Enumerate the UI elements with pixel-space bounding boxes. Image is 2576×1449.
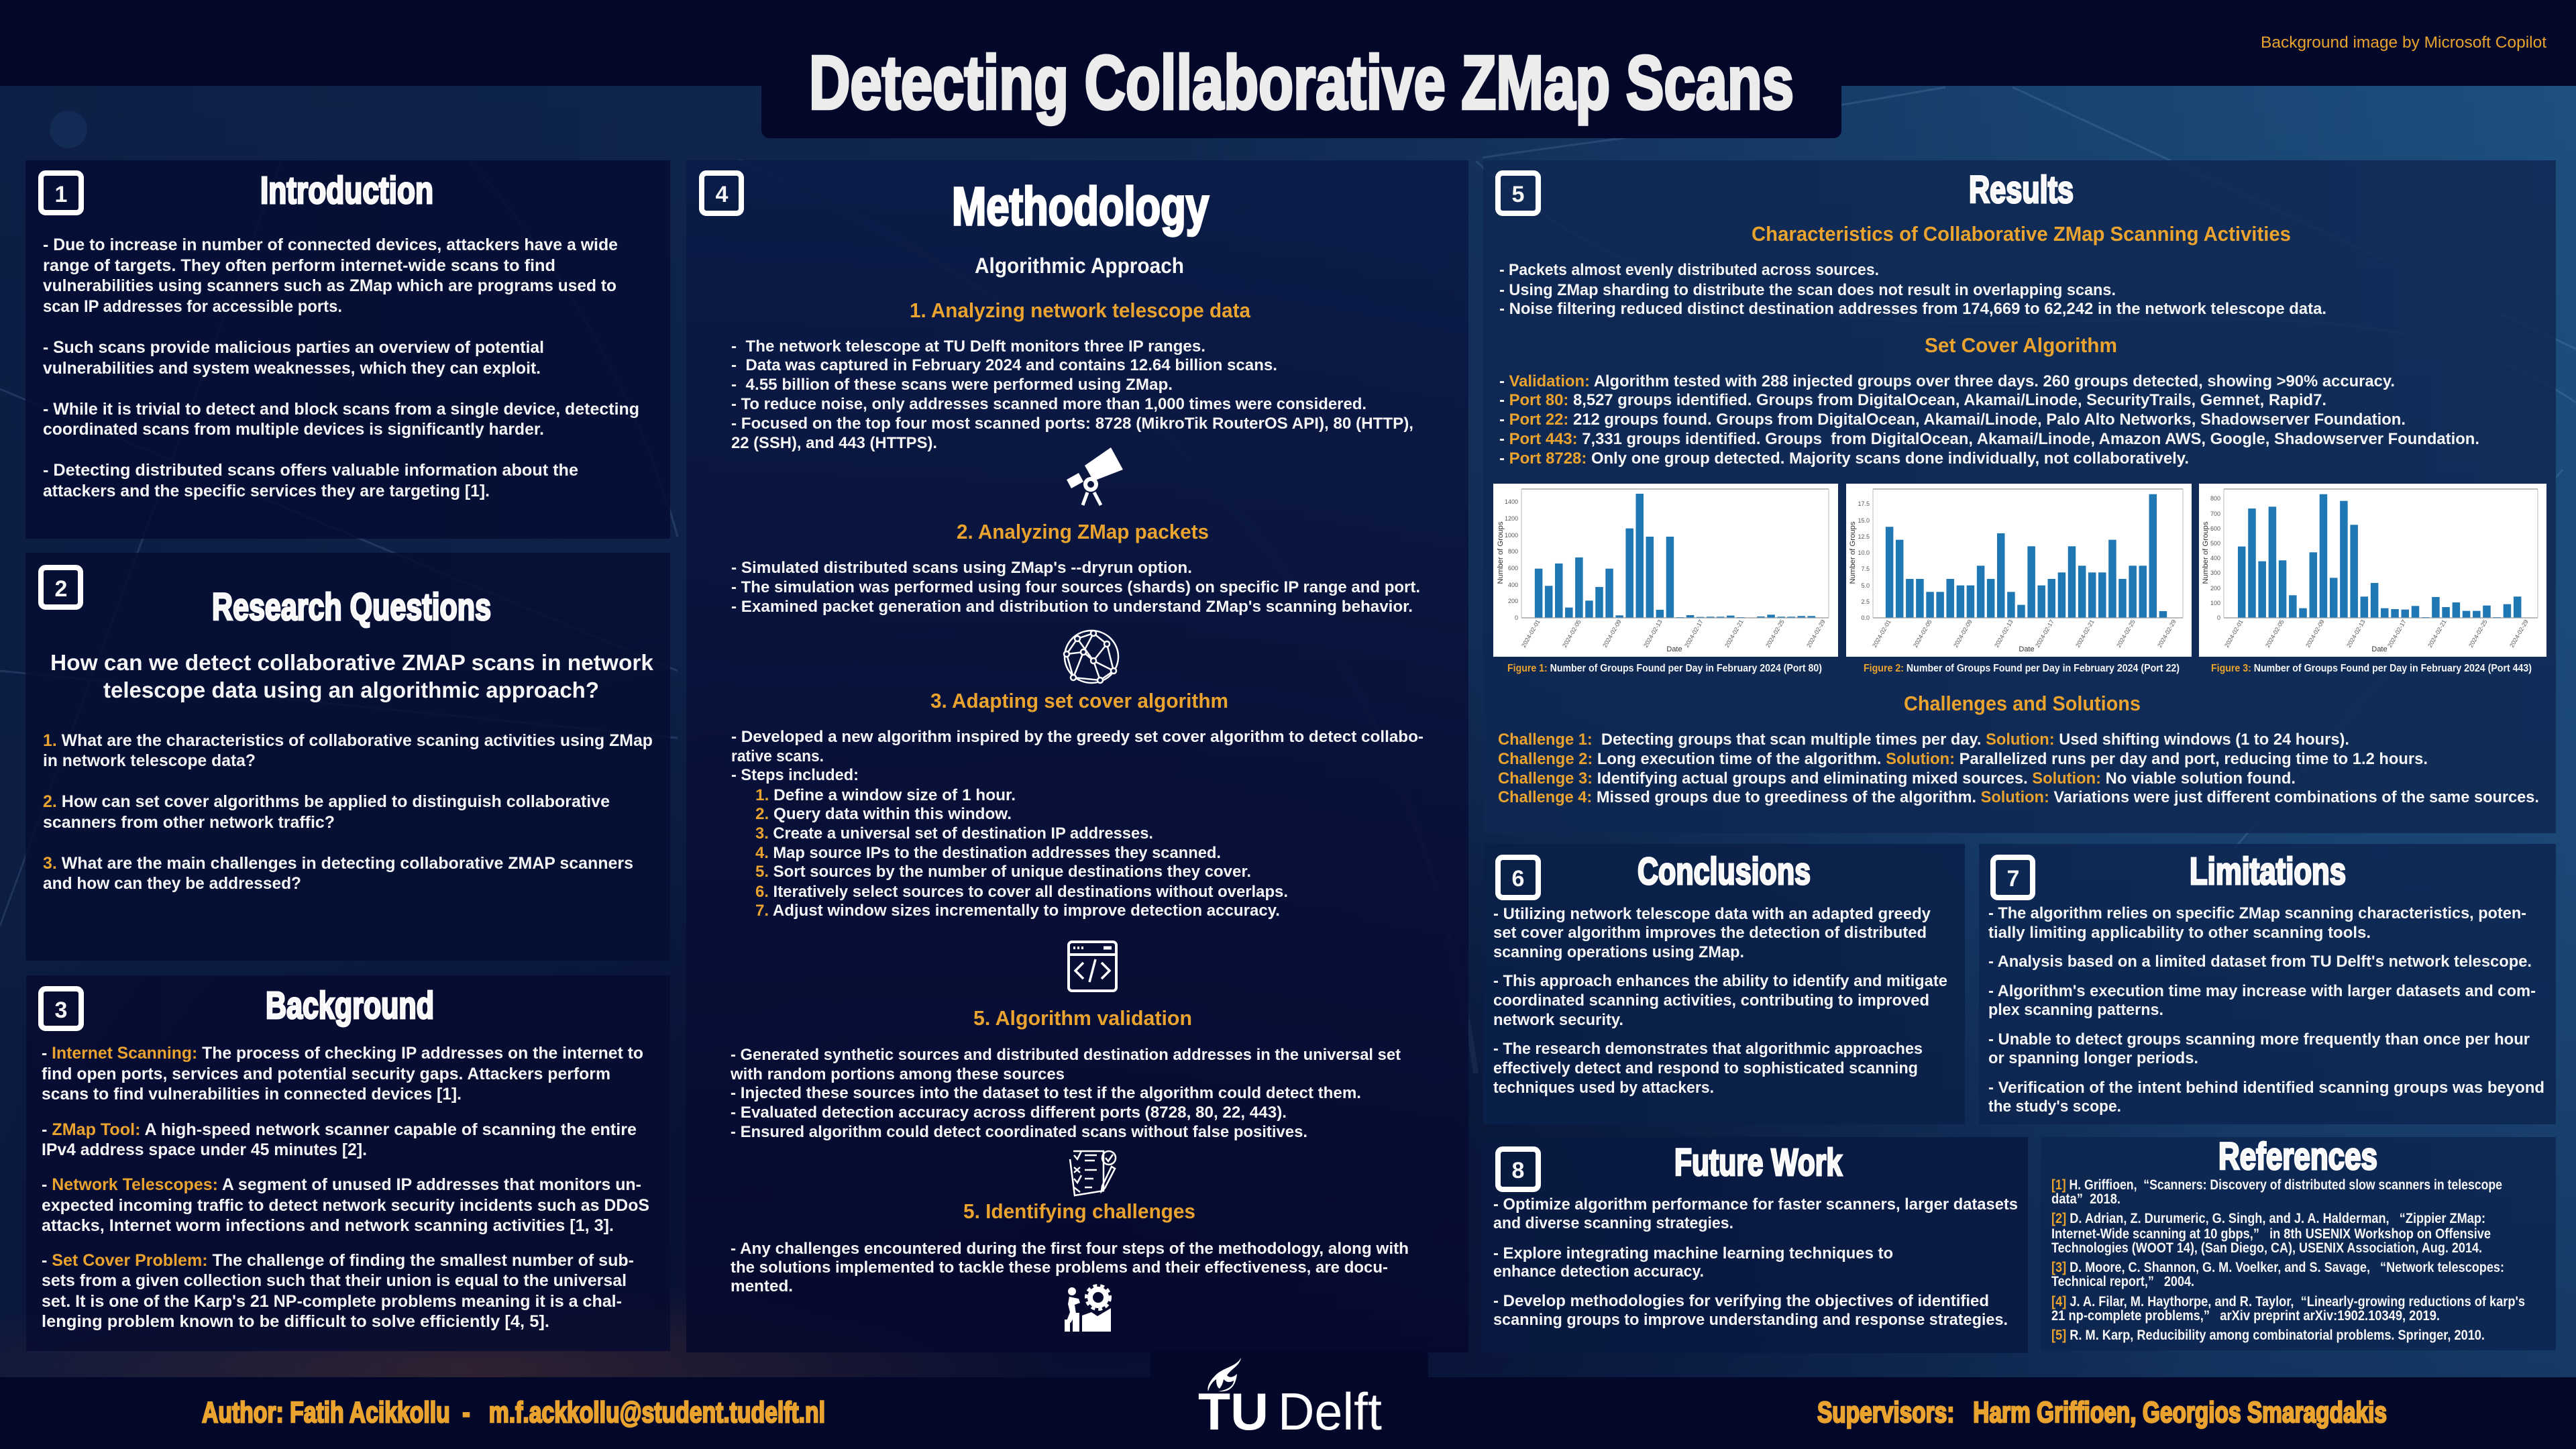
body text xyxy=(42,1044,649,1331)
body text: network security. xyxy=(1493,1011,1623,1029)
chart: port 80: 200 xyxy=(1508,598,1518,604)
chart: port 443 xyxy=(2199,484,2546,657)
step 4 text xyxy=(730,1046,1401,1141)
badge 5: 5 xyxy=(1512,182,1524,207)
heading: References xyxy=(2218,1135,2377,1178)
set cover text: - Validation: Algorithm tested with 288 injected groups over three days. 260 groups detected, showing >90% accuracy. xyxy=(1499,372,2395,390)
body text: - The research demonstrates that algorithmic approaches xyxy=(1493,1040,1923,1058)
challenges text: Challenge 3: Identifying actual groups and eliminating mixed sources. Solution: No viable solution found. xyxy=(1498,769,2296,788)
body text: effectively detect and respond to sophisticated scanning xyxy=(1493,1059,1918,1077)
chart: port 80: 2024-02-05 xyxy=(1561,619,1582,649)
chart: port 22: 5.0 xyxy=(1861,582,1870,589)
body text: - Network Telescopes: A segment of unused IP addresses that monitors un- xyxy=(42,1175,641,1194)
chart: port 80: Date xyxy=(1666,645,1682,653)
chart: port 443: 300 xyxy=(2210,570,2220,576)
step 5 text: the solutions implemented to tackle these problems and their effectiveness, are docu- xyxy=(731,1258,1388,1277)
body text: - Utilizing network telescope data with an adapted greedy xyxy=(1493,905,1931,923)
chart: port 80: 1000 xyxy=(1505,532,1518,539)
challenges text xyxy=(1498,731,2539,806)
body text: vulnerabilities using scanners such as ZMap which are programs used to xyxy=(43,276,616,295)
icon: telescope xyxy=(1067,447,1123,505)
body text xyxy=(1493,905,1947,1097)
heading: Methodology xyxy=(952,176,1209,236)
body text: scan IP addresses for accessible ports. xyxy=(43,297,342,316)
panel: results xyxy=(1483,160,2556,833)
badge 6 xyxy=(1498,857,1538,898)
chart: port 443: 200 xyxy=(2210,585,2220,592)
chart: port 80 xyxy=(1493,484,1838,657)
set cover text: - Port 22: 212 groups found. Groups from DigitalOcean, Akamai/Linode, Palo Alto Networks, Shadowserver Foundation. xyxy=(1499,411,2406,429)
heading: Research Questions xyxy=(212,586,491,629)
body text: - Unable to detect groups scanning more frequently than once per hour xyxy=(1988,1030,2530,1049)
badge 2: 2 xyxy=(55,576,67,602)
set cover text: - Port 8728: Only one group detected. Majority scans done individually, not collaboratively. xyxy=(1499,449,2189,468)
chart: port 22: 0.0 xyxy=(1861,614,1870,621)
step 1 text: - The network telescope at TU Delft monitors three IP ranges. xyxy=(731,337,1205,356)
heading: Limitations xyxy=(2190,850,2346,893)
badge 1: 1 xyxy=(55,182,67,207)
heading: Background xyxy=(266,984,434,1027)
figure captions xyxy=(1507,663,2532,674)
chart: port 22: 17.5 xyxy=(1858,500,1870,507)
body text: plex scanning patterns. xyxy=(1988,1001,2163,1019)
step 1 text: - Data was captured in February 2024 and contains 12.64 billion scans. xyxy=(731,356,1277,374)
subheading: set cover: Set Cover Algorithm xyxy=(1925,333,2117,357)
body text xyxy=(1493,1195,2018,1329)
main question: telescope data using an algorithmic approach? xyxy=(103,678,599,702)
set cover text: - Port 443: 7,331 groups identified. Groups from DigitalOcean, Akamai/Linode, Amazon AWS, Google, Shadowserver Foundation. xyxy=(1499,430,2479,448)
reference list: data” 2018. xyxy=(2051,1191,2121,1207)
step 3 text: 2. Query data within this window. xyxy=(755,805,1012,823)
step 4 text: - Evaluated detection accuracy across different ports (8728, 80, 22, 443). xyxy=(731,1104,1287,1122)
step 2 heading: 2. Analyzing ZMap packets xyxy=(957,520,1209,543)
body text: - Such scans provide malicious parties an overview of potential xyxy=(43,338,544,357)
body text: - While it is trivial to detect and block scans from a single device, detecting xyxy=(43,400,639,419)
title: Detecting Collaborative ZMap Scans xyxy=(809,40,1794,125)
body text: - ZMap Tool: A high-speed network scanner capable of scanning the entire xyxy=(42,1120,637,1139)
heading: Results xyxy=(1969,168,2074,211)
body text: range of targets. They often perform internet-wide scans to find xyxy=(43,256,555,275)
body text: - Internet Scanning: The process of checking IP addresses on the internet to xyxy=(42,1044,643,1063)
step 5 heading: 5. Identifying challenges xyxy=(963,1199,1195,1223)
step 1 text: - 4.55 billion of these scans were performed using ZMap. xyxy=(731,376,1173,394)
title xyxy=(761,40,1841,138)
questions list: 1. What are the characteristics of collaborative scaning activities using ZMap xyxy=(43,731,653,750)
chart: port 22: 10.0 xyxy=(1858,549,1870,556)
heading: Conclusions xyxy=(1638,850,1811,893)
body text: tially limiting applicability to other scanning tools. xyxy=(1988,924,2371,942)
chart: port 22: 12.5 xyxy=(1858,533,1870,540)
body text: - Verification of the intent behind identified scanning groups was beyond xyxy=(1988,1079,2544,1097)
chart: port 443: Date xyxy=(2371,645,2387,653)
badge 7 xyxy=(1993,857,2033,898)
step 2 text: - Simulated distributed scans using ZMap's --dryrun option. xyxy=(731,559,1192,577)
icon: TU Delft logo: TU xyxy=(1198,1382,1269,1441)
characteristics text: - Packets almost evenly distributed across sources. xyxy=(1499,261,1879,279)
figure captions: Figure 2: Number of Groups Found per Day in February 2024 (Port 22) xyxy=(1864,663,2180,674)
chart: port 22: 7.5 xyxy=(1861,566,1870,572)
body text: find open ports, services and potential security gaps. Attackers perform xyxy=(42,1065,610,1083)
characteristics text: - Noise filtering reduced distinct destination addresses from 174,669 to 62,242 in the network telescope data. xyxy=(1499,300,2326,318)
main question xyxy=(50,650,654,702)
body text: set. It is one of the Karp's 21 NP-complete problems meaning it is a chal- xyxy=(42,1292,622,1311)
footer logo tab xyxy=(1150,1350,1428,1404)
icon: globe network xyxy=(1064,631,1118,683)
body text: lenging problem known to be difficult to solve efficiently [4, 5]. xyxy=(42,1312,549,1331)
chart: port 80: 2024-02-13 xyxy=(1642,619,1664,649)
body text xyxy=(43,235,639,500)
badge 3: 3 xyxy=(55,998,67,1023)
badge 1 xyxy=(41,173,81,213)
chart: port 22: 15.0 xyxy=(1858,517,1870,524)
panel: conclusions xyxy=(1483,844,1965,1124)
body text: scanning operations using ZMap. xyxy=(1493,943,1744,961)
characteristics text xyxy=(1499,261,2326,318)
reference list: [2] D. Adrian, Z. Durumeric, G. Singh, and J. A. Halderman, “Zippier ZMap: xyxy=(2051,1211,2485,1226)
challenges text: Challenge 1: Detecting groups that scan multiple times per day. Solution: Used shifting windows (1 to 24 hours). xyxy=(1498,731,2349,749)
panel: future work xyxy=(1482,1137,2028,1353)
step 3 text: 7. Adjust window sizes incrementally to improve detection accuracy. xyxy=(755,902,1280,920)
step 3 text: 3. Create a universal set of destination IP addresses. xyxy=(755,824,1153,843)
chart: port 22: 2024-02-13 xyxy=(1993,619,2015,649)
questions list: scanners from other network traffic? xyxy=(43,813,335,832)
body text: - This approach enhances the ability to identify and mitigate xyxy=(1493,972,1947,990)
chart: port 443: 0 xyxy=(2217,614,2220,621)
badge 8: 8 xyxy=(1512,1158,1524,1183)
chart: port 80: 2024-02-17 xyxy=(1683,619,1705,649)
chart: port 443: 2024-02-09 xyxy=(2304,619,2326,649)
chart: port 443: 700 xyxy=(2210,511,2220,517)
chart: port 22: 2024-02-25 xyxy=(2115,619,2137,649)
body text: or spanning longer periods. xyxy=(1988,1049,2198,1067)
reference list: Internet-Wide scanning at 10 gbps,” in 8th USENIX Workshop on Offensive xyxy=(2051,1226,2491,1242)
chart: port 22: 2024-02-29 xyxy=(2156,619,2178,649)
chart: port 80: 400 xyxy=(1508,582,1518,588)
body text: attacks, Internet worm infections and network scanning activities [1, 3]. xyxy=(42,1216,614,1235)
chart: port 80: Number of Groups xyxy=(1497,521,1505,584)
chart: port 443: 2024-02-05 xyxy=(2264,619,2286,649)
badge 5 xyxy=(1498,173,1538,213)
questions list: 3. What are the main challenges in detecting collaborative ZMAP scanners xyxy=(43,854,633,873)
step 4 text: - Injected these sources into the dataset to test if the algorithm could detect them. xyxy=(731,1084,1361,1102)
chart: port 80: 2024-02-29 xyxy=(1805,619,1827,649)
badge 4: 4 xyxy=(716,182,729,207)
badge 7: 7 xyxy=(2007,866,2019,892)
body text: scanning groups to improve understanding and response strategies. xyxy=(1493,1311,2008,1329)
panel: introduction xyxy=(25,160,670,539)
step 5 text: - Any challenges encountered during the first four steps of the methodology, along with xyxy=(731,1240,1409,1258)
body text: sets from a given collection such that their union is equal to the universal xyxy=(42,1271,627,1290)
icon: TU Delft logo: Delft xyxy=(1278,1382,1382,1441)
body text: and diverse scanning strategies. xyxy=(1493,1214,1733,1232)
chart: port 22: 2024-02-21 xyxy=(2074,619,2096,649)
top band xyxy=(0,0,2576,86)
questions list: and how can they be addressed? xyxy=(43,874,301,893)
questions list xyxy=(43,731,653,893)
body text: - Develop methodologies for verifying the objectives of identified xyxy=(1493,1292,1989,1310)
step 2 text: - Examined packet generation and distribution to understand ZMap's scanning behavior. xyxy=(731,598,1413,616)
subheading: characteristics: Characteristics of Collaborative ZMap Scanning Activities xyxy=(1752,222,2291,246)
step 4 text: with random portions among these sources xyxy=(730,1065,1065,1083)
chart: port 443: 400 xyxy=(2210,555,2220,561)
step 5 text: mented. xyxy=(731,1277,793,1295)
step 3 text: 1. Define a window size of 1 hour. xyxy=(755,786,1016,804)
step 5 text xyxy=(731,1240,1409,1295)
reference list: Technical report,” 2004. xyxy=(2051,1274,2194,1289)
chart: port 443: 800 xyxy=(2210,495,2220,502)
chart: port 80: 1400 xyxy=(1505,498,1518,505)
body text: coordinated scanning activities, contributing to improved xyxy=(1493,991,1929,1010)
set cover text: - Port 80: 8,527 groups identified. Groups from DigitalOcean, Akamai/Linode, SecurityTrails, Gemnet, Rapid7. xyxy=(1499,391,2326,409)
set cover text xyxy=(1499,372,2479,468)
chart: port 443: 600 xyxy=(2210,525,2220,532)
chart: port 80: 0 xyxy=(1515,614,1518,621)
body text: expected incoming traffic to detect network security incidents such as DDoS xyxy=(42,1196,649,1215)
reference list: 21 np-complete problems,” arXiv preprint arXiv:1902.10349, 2019. xyxy=(2051,1308,2440,1324)
body text: vulnerabilities and system weaknesses, which they can exploit. xyxy=(43,359,541,378)
body text: - Set Cover Problem: The challenge of finding the smallest number of sub- xyxy=(42,1251,634,1270)
chart: port 80: 2024-02-21 xyxy=(1723,619,1745,649)
challenges text: Challenge 2: Long execution time of the algorithm. Solution: Parallelized runs per day and port, reducing time to 1.2 hours. xyxy=(1498,750,2428,768)
chart: port 22: 2024-02-01 xyxy=(1871,619,1892,649)
badge 3 xyxy=(41,989,81,1028)
step 3 text: 5. Sort sources by the number of unique destinations they cover. xyxy=(755,863,1251,881)
step 3 heading: 3. Adapting set cover algorithm xyxy=(930,689,1228,712)
step 1 text xyxy=(731,337,1413,452)
chart: port 22: Number of Groups xyxy=(1849,521,1857,584)
body text: set cover algorithm improves the detection of distributed xyxy=(1493,924,1927,942)
footer band xyxy=(0,1377,2576,1449)
chart: port 443: 2024-02-17 xyxy=(2386,619,2408,649)
body text: - Explore integrating machine learning techniques to xyxy=(1493,1244,1893,1263)
chart: port 443: 500 xyxy=(2210,540,2220,547)
step 2 text xyxy=(731,559,1420,616)
chart: port 22: 2.5 xyxy=(1861,598,1870,605)
step 3 text: rative scans. xyxy=(731,747,824,765)
panel: research questions xyxy=(25,553,670,961)
panel: references xyxy=(2041,1135,2556,1350)
chart: port 443: 2024-02-25 xyxy=(2467,619,2489,649)
figure captions: Figure 1: Number of Groups Found per Day in February 2024 (Port 80) xyxy=(1507,663,1822,674)
body text: - The algorithm relies on specific ZMap scanning characteristics, poten- xyxy=(1988,904,2526,922)
body text: - Analysis based on a limited dataset from TU Delft's network telescope. xyxy=(1988,953,2532,971)
chart: port 80: 800 xyxy=(1508,548,1518,555)
chart: port 22: Date xyxy=(2019,645,2035,653)
step 3 text xyxy=(731,728,1424,920)
step 4 text: - Ensured algorithm could detect coordinated scans without false positives. xyxy=(731,1123,1307,1141)
panel: limitations xyxy=(1979,844,2556,1124)
chart: port 22 xyxy=(1846,484,2192,657)
heading: Future Work xyxy=(1674,1141,1842,1184)
reference list xyxy=(2051,1177,2525,1343)
chart: port 22: 2024-02-17 xyxy=(2034,619,2055,649)
main question: How can we detect collaborative ZMAP scans in network xyxy=(50,650,654,675)
subheading: challenges: Challenges and Solutions xyxy=(1904,692,2141,715)
chart: port 22: 2024-02-05 xyxy=(1912,619,1933,649)
body text: coordinated scans from multiple devices is significantly harder. xyxy=(43,420,544,439)
chart: port 443: Number of Groups xyxy=(2202,521,2210,584)
body text xyxy=(1988,904,2544,1116)
body text: - Optimize algorithm performance for faster scanners, larger datasets xyxy=(1493,1195,2018,1214)
panel: background xyxy=(26,975,670,1351)
chart: port 443: 2024-02-01 xyxy=(2223,619,2245,649)
icon: code window xyxy=(1069,942,1116,991)
badge 8 xyxy=(1498,1149,1538,1189)
body text: enhance detection accuracy. xyxy=(1493,1263,1704,1281)
body text: - Detecting distributed scans offers valuable information about the xyxy=(43,461,578,480)
badge 2 xyxy=(41,568,80,607)
body text: techniques used by attackers. xyxy=(1493,1079,1714,1097)
image credit: Background image by Microsoft Copilot xyxy=(2261,34,2546,52)
step 4 heading: 5. Algorithm validation xyxy=(973,1006,1192,1030)
chart: port 80: 2024-02-25 xyxy=(1764,619,1786,649)
chart: port 443: 2024-02-21 xyxy=(2426,619,2448,649)
body text: - Due to increase in number of connected devices, attackers have a wide xyxy=(43,235,618,254)
questions list: 2. How can set cover algorithms be applied to distinguish collaborative xyxy=(43,792,610,811)
chart: port 80: 600 xyxy=(1508,565,1518,572)
badge 4 xyxy=(702,173,741,213)
chart: port 80: 1200 xyxy=(1505,515,1518,522)
step 1 text: - Focused on the top four most scanned ports: 8728 (MikroTik RouterOS API), 80 (HTTP), xyxy=(731,415,1413,433)
step 3 text: 6. Iteratively select sources to cover all destinations without overlaps. xyxy=(755,883,1288,901)
step 1 heading: 1. Analyzing network telescope data xyxy=(910,299,1251,322)
figure captions: Figure 3: Number of Groups Found per Day in February 2024 (Port 443) xyxy=(2211,663,2532,674)
reference list: [5] R. M. Karp, Reducibility among combinatorial problems. Springer, 2010. xyxy=(2051,1328,2485,1343)
chart: port 443: 2024-02-13 xyxy=(2345,619,2367,649)
footer: author: Author: Fatih Acikkollu - m.f.ackkollu@student.tudelft.nl xyxy=(202,1396,825,1429)
heading: Introduction xyxy=(260,169,433,212)
chart: port 443: 100 xyxy=(2210,600,2220,606)
reference list: [3] D. Moore, C. Shannon, G. M. Voelker, and S. Savage, “Network telescopes: xyxy=(2051,1260,2504,1275)
step 4 text: - Generated synthetic sources and distributed destination addresses in the universal set xyxy=(731,1046,1401,1064)
step 1 text: 22 (SSH), and 443 (HTTPS). xyxy=(731,434,937,452)
body text: - Algorithm's execution time may increase with larger datasets and com- xyxy=(1988,982,2536,1000)
characteristics text: - Using ZMap sharding to distribute the scan does not result in overlapping scans. xyxy=(1499,281,2116,299)
subheading: Algorithmic Approach xyxy=(975,254,1184,278)
reference list: [1] H. Griffioen, “Scanners: Discovery of distributed slow scanners in telescope xyxy=(2051,1177,2502,1193)
icon: person and gear xyxy=(1065,1285,1111,1332)
icon: TU Delft logo xyxy=(1198,1358,1382,1441)
body text: scans to find vulnerabilities in connected devices [1]. xyxy=(42,1085,462,1104)
step 3 text: - Steps included: xyxy=(731,766,859,784)
icon: checklist xyxy=(1070,1151,1116,1195)
body text: IPv4 address space under 45 minutes [2]. xyxy=(42,1140,367,1159)
step 3 text: 4. Map source IPs to the destination addresses they scanned. xyxy=(755,844,1221,862)
body text: attackers and the specific services they are targeting [1]. xyxy=(43,482,490,500)
step 1 text: - To reduce noise, only addresses scanned more than 1,000 times were considered. xyxy=(731,395,1366,413)
step 2 text: - The simulation was performed using four sources (shards) on specific IP range and port. xyxy=(731,578,1420,596)
badge 6: 6 xyxy=(1512,866,1524,892)
chart: port 22: 2024-02-09 xyxy=(1952,619,1974,649)
footer: supervisors: Supervisors: Harm Griffioen, Georgios Smaragdakis xyxy=(1817,1396,2387,1429)
reference list: Technologies (WOOT 14), (San Diego, CA), USENIX Association, Aug. 2014. xyxy=(2051,1240,2482,1256)
questions list: in network telescope data? xyxy=(43,751,256,770)
step 3 text: - Developed a new algorithm inspired by the greedy set cover algorithm to detect collabo- xyxy=(731,728,1424,746)
challenges text: Challenge 4: Missed groups due to greediness of the algorithm. Solution: Variations were just different combinations of the same sources. xyxy=(1498,788,2539,806)
chart: port 443: 2024-02-29 xyxy=(2508,619,2530,649)
body text: the study's scope. xyxy=(1988,1097,2121,1116)
chart: port 80: 2024-02-09 xyxy=(1601,619,1623,649)
chart: port 80: 2024-02-01 xyxy=(1520,619,1542,649)
panel: methodology xyxy=(686,160,1468,1352)
